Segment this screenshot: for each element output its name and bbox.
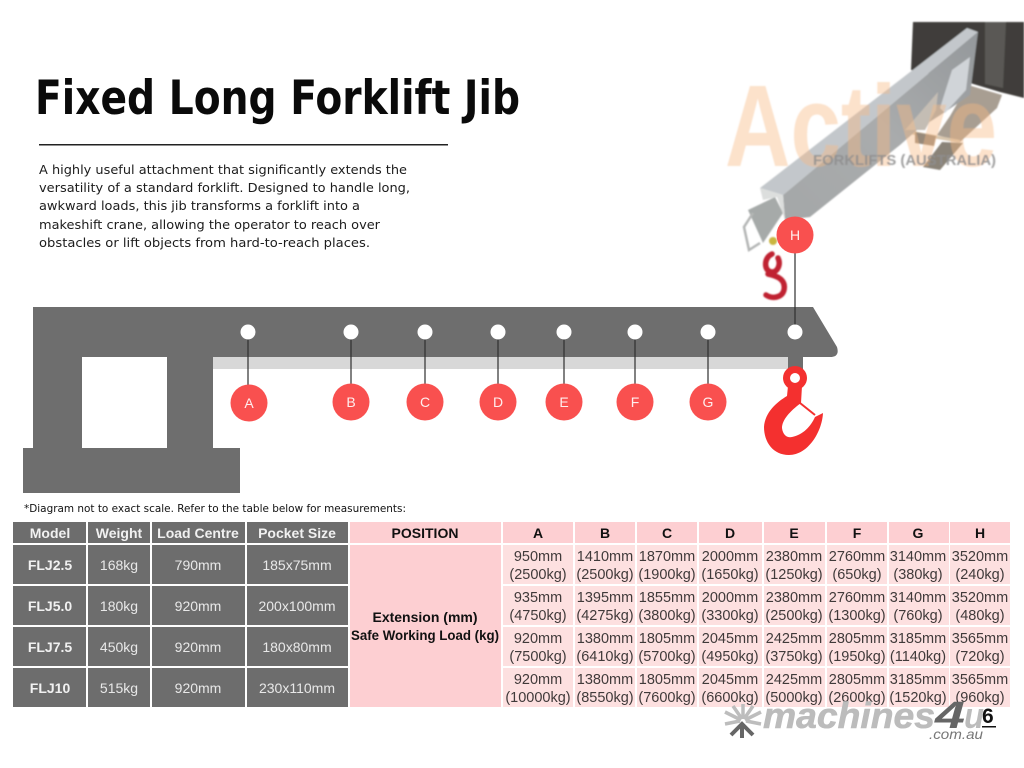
row FLJ7.5 values: 1380mm — [577, 631, 633, 647]
table: model specifications: Load Centre — [157, 525, 239, 541]
table: model specifications: Pocket Size — [258, 525, 336, 541]
row FLJ10 values: 1805mm — [639, 672, 695, 688]
row FLJ2.5 values: 2380mm — [766, 549, 822, 565]
table: position data: F — [853, 525, 862, 541]
icon: lifting hook — [764, 366, 823, 455]
table: position data: E — [789, 525, 799, 541]
collar — [760, 188, 785, 220]
row FLJ10 values: 2425mm — [766, 672, 822, 688]
row FLJ2.5 values: 1870mm — [639, 549, 695, 565]
table: model specifications: 200x100mm — [258, 598, 336, 614]
row FLJ7.5 values: 1805mm — [639, 631, 695, 647]
row FLJ2.5 values — [509, 549, 1008, 583]
row FLJ10 values: (960kg) — [955, 690, 1005, 706]
row FLJ5.0 values: (480kg) — [955, 608, 1005, 624]
fork tine — [923, 142, 963, 170]
table: model specifications: 230x110mm — [259, 680, 335, 696]
table: position data: Safe Working Load (kg) — [351, 627, 499, 643]
table: model specifications: FLJ7.5 — [28, 639, 72, 655]
logo digit: 4 — [934, 695, 965, 737]
row FLJ7.5 values: 2045mm — [702, 631, 758, 647]
carriage backplate — [911, 22, 1024, 98]
row FLJ2.5 values: (2500kg) — [576, 567, 634, 583]
marker D: D — [493, 394, 503, 410]
handle — [744, 213, 760, 250]
row FLJ10 values: (5000kg) — [765, 690, 823, 706]
hook post — [788, 357, 803, 371]
row FLJ5.0 values: 2380mm — [766, 590, 822, 606]
table: model specifications: Model — [30, 525, 70, 541]
row FLJ5.0 values: (1300kg) — [828, 608, 886, 624]
marker G — [690, 324, 726, 420]
icon: logo star — [725, 704, 761, 738]
row FLJ5.0 values: 3520mm — [952, 590, 1008, 606]
row FLJ2.5 values: (380kg) — [893, 567, 943, 583]
row FLJ5.0 values: (3300kg) — [701, 608, 759, 624]
table: model specifications: 920mm — [175, 680, 221, 696]
jib top face — [760, 28, 978, 195]
row FLJ5.0 values: 2000mm — [702, 590, 758, 606]
row FLJ10 values: (7600kg) — [638, 690, 696, 706]
marker E — [546, 324, 582, 420]
jib body — [23, 307, 838, 493]
photo: forklift jib attachment — [725, 22, 1024, 297]
table: model specifications: FLJ5.0 — [28, 598, 72, 614]
row FLJ10 values: 3185mm — [890, 672, 946, 688]
row FLJ7.5 values: 2805mm — [829, 631, 885, 647]
yellow shackle — [769, 237, 777, 245]
row FLJ10 values: (2600kg) — [828, 690, 886, 706]
table: model specifications: 168kg — [100, 557, 138, 573]
page number: 6 — [982, 705, 994, 728]
marker G: G — [703, 394, 713, 410]
row FLJ7.5 values: (720kg) — [955, 649, 1005, 665]
marker H — [776, 216, 814, 340]
table: position data: A — [533, 525, 543, 541]
logo domain: .com.au — [929, 726, 983, 742]
table: position data: POSITION — [392, 525, 458, 541]
pallet block — [915, 132, 936, 146]
fork plate — [937, 85, 1002, 142]
row FLJ2.5 values: (1650kg) — [701, 567, 759, 583]
logo wordmark: machines — [763, 695, 935, 736]
row FLJ5.0 values: 2760mm — [829, 590, 885, 606]
row FLJ5.0 values: 1855mm — [639, 590, 695, 606]
row FLJ7.5 values: (1140kg) — [890, 649, 946, 665]
table: model specifications: Weight — [96, 525, 143, 541]
table: model specifications: 920mm — [175, 598, 221, 614]
marker A: A — [244, 395, 254, 411]
row FLJ5.0 values: (3800kg) — [638, 608, 696, 624]
title: Fixed Long Forklift Jib — [35, 71, 520, 126]
light under-rail — [213, 357, 789, 369]
description text — [39, 163, 410, 251]
table: position data: H — [975, 525, 985, 541]
row FLJ10 values — [505, 672, 1008, 706]
marker B: B — [346, 394, 356, 410]
pallet — [898, 128, 960, 143]
row FLJ2.5 values: (1900kg) — [638, 567, 696, 583]
watermark subtitle: FORKLIFTS (AUSTRALIA) — [813, 153, 996, 169]
row FLJ10 values: 1380mm — [577, 672, 633, 688]
row FLJ5.0 values: 1395mm — [577, 590, 633, 606]
table: model specifications — [13, 522, 348, 707]
row FLJ5.0 values: 935mm — [514, 590, 562, 606]
row FLJ10 values: (10000kg) — [505, 690, 571, 706]
row FLJ10 values: 3565mm — [952, 672, 1008, 688]
table: model specifications: 185x75mm — [262, 557, 332, 573]
row FLJ7.5 values: 920mm — [514, 631, 562, 647]
row FLJ2.5 values: 2000mm — [702, 549, 758, 565]
row FLJ2.5 values: (1250kg) — [765, 567, 823, 583]
row FLJ2.5 values: 1410mm — [577, 549, 633, 565]
jib lower opening — [905, 92, 938, 130]
row FLJ10 values: (1520kg) — [889, 690, 947, 706]
jib diagram — [23, 216, 838, 493]
marker B — [332, 324, 370, 420]
logo letter: u — [964, 695, 984, 736]
table: position data: D — [725, 525, 735, 541]
row FLJ7.5 values: (6410kg) — [576, 649, 634, 665]
table: position data: Extension (mm) — [372, 609, 478, 625]
row FLJ7.5 values — [509, 631, 1008, 665]
description text: makeshift crane, allowing the operator to reach over — [39, 218, 381, 233]
marker C — [406, 324, 444, 420]
small hook — [766, 254, 784, 297]
row FLJ5.0 values — [509, 590, 1008, 624]
row FLJ10 values: (6600kg) — [701, 690, 759, 706]
row FLJ7.5 values: (1950kg) — [828, 649, 886, 665]
row FLJ7.5 values: (5700kg) — [638, 649, 696, 665]
table: model specifications: FLJ2.5 — [28, 557, 72, 573]
description text: awkward loads, this jib transforms a forklift into a — [39, 199, 360, 214]
row FLJ2.5 values: 3520mm — [952, 549, 1008, 565]
table: model specifications: 450kg — [100, 639, 138, 655]
row FLJ5.0 values: (4750kg) — [509, 608, 567, 624]
row FLJ7.5 values: 3565mm — [952, 631, 1008, 647]
inner extension — [748, 197, 783, 243]
row FLJ2.5 values: (2500kg) — [509, 567, 567, 583]
table: model specifications: 920mm — [175, 639, 221, 655]
marker H: H — [790, 227, 800, 243]
row FLJ5.0 values: (2500kg) — [765, 608, 823, 624]
row FLJ10 values: 2805mm — [829, 672, 885, 688]
row FLJ5.0 values: 3140mm — [890, 590, 946, 606]
carriage plate highlight — [985, 22, 1006, 88]
row FLJ10 values: 2045mm — [702, 672, 758, 688]
jib upper window — [940, 57, 970, 113]
table: model specifications: 180kg — [100, 598, 138, 614]
row FLJ7.5 values: (4950kg) — [701, 649, 759, 665]
table: position data: B — [600, 525, 610, 541]
row FLJ2.5 values: (240kg) — [955, 567, 1005, 583]
row FLJ7.5 values: 3185mm — [890, 631, 946, 647]
marker A — [230, 324, 268, 422]
description text: versatility of a standard forklift. Designed to handle long, — [39, 181, 410, 196]
diagram note: *Diagram not to exact scale. Refer to the table below for measurements: — [24, 502, 406, 515]
row FLJ5.0 values: (4275kg) — [576, 608, 634, 624]
table: position data: G — [913, 525, 924, 541]
marker F — [616, 324, 654, 420]
description text: obstacles or lift objects from hard-to-reach places. — [39, 236, 370, 251]
table: model specifications: 790mm — [175, 557, 221, 573]
marker E: E — [559, 394, 569, 410]
row FLJ5.0 values: (760kg) — [893, 608, 943, 624]
table: model specifications: FLJ10 — [30, 680, 70, 696]
marker D — [480, 324, 516, 420]
description text: A highly useful attachment that significantly extends the — [39, 163, 407, 178]
row FLJ7.5 values: (7500kg) — [509, 649, 567, 665]
table: position data: C — [662, 525, 672, 541]
row FLJ10 values: 920mm — [514, 672, 562, 688]
jib side face — [783, 32, 978, 220]
marker F: F — [631, 394, 639, 410]
table: position data — [350, 522, 1010, 707]
row FLJ2.5 values: 950mm — [514, 549, 562, 565]
row FLJ2.5 values: (650kg) — [832, 567, 882, 583]
row FLJ2.5 values: 3140mm — [890, 549, 946, 565]
row FLJ10 values: (8550kg) — [576, 690, 634, 706]
table: model specifications: 180x80mm — [262, 639, 332, 655]
row FLJ7.5 values: 2425mm — [766, 631, 822, 647]
row FLJ2.5 values: 2760mm — [829, 549, 885, 565]
row FLJ7.5 values: (3750kg) — [765, 649, 823, 665]
table: model specifications: 515kg — [100, 680, 138, 696]
logo: machines4u — [725, 695, 996, 742]
marker C: C — [420, 394, 430, 410]
